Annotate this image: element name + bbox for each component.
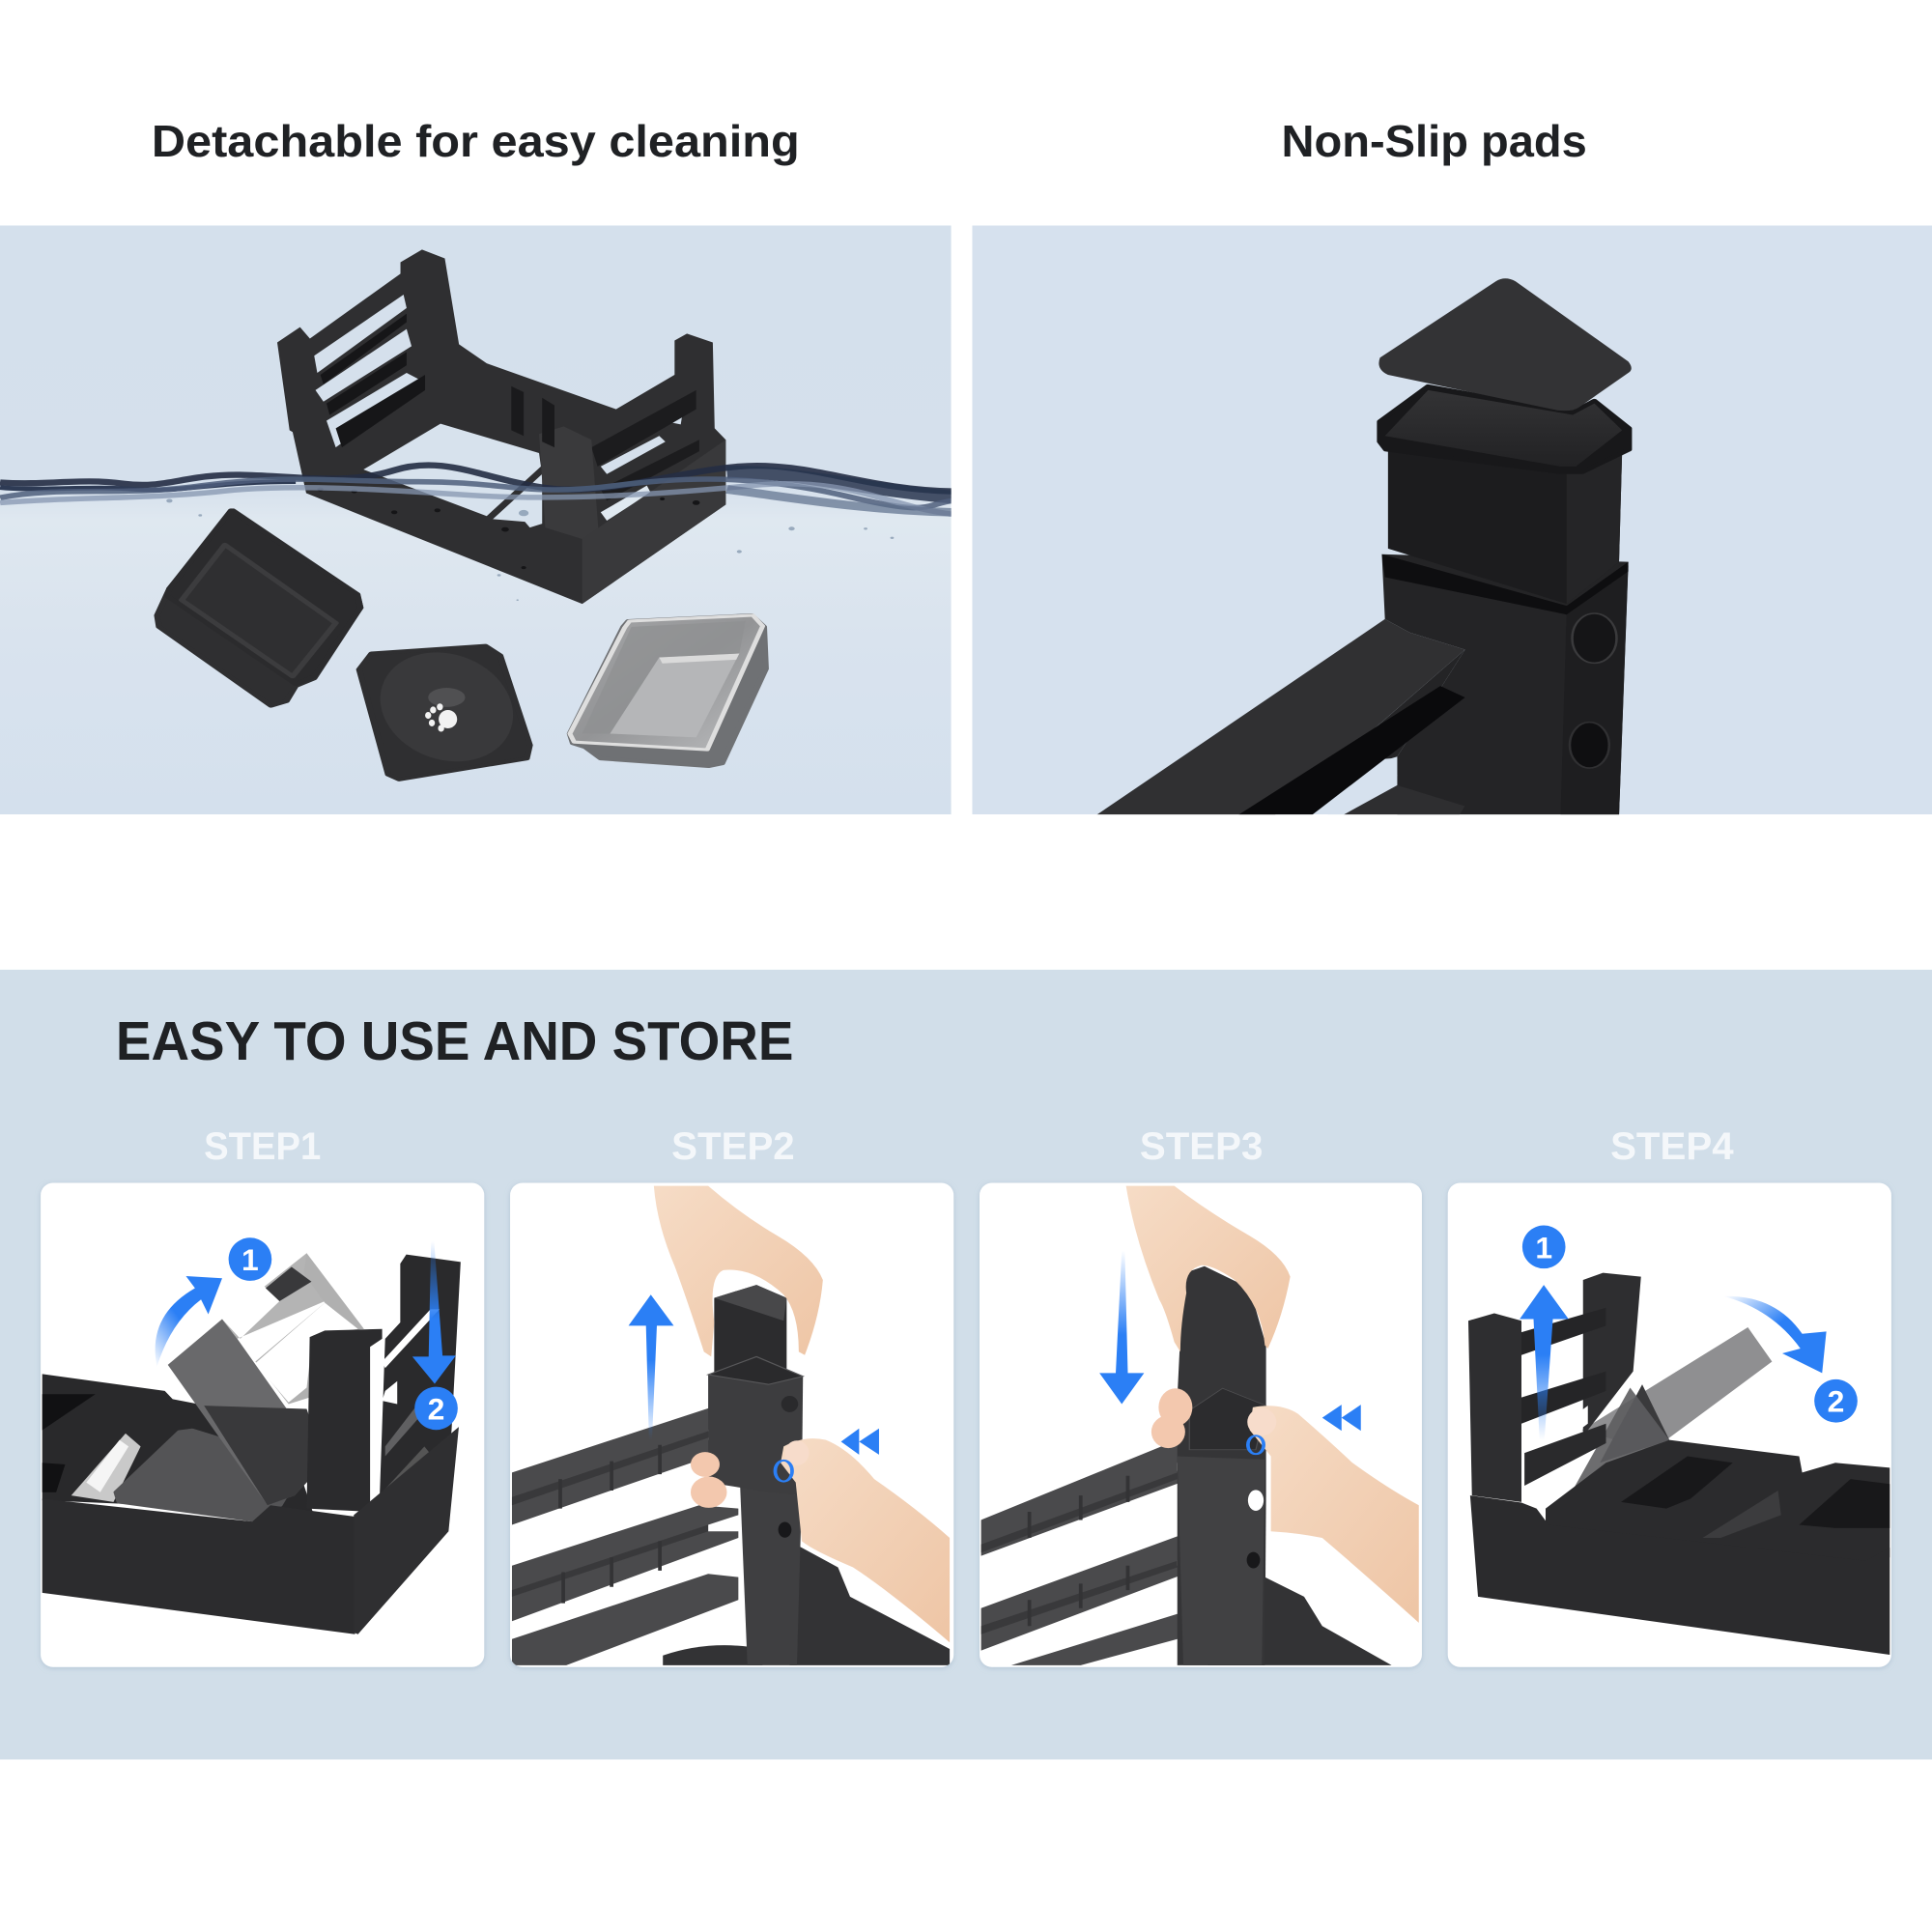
right base piece [1208,1577,1392,1665]
panel: non-slip pads [972,225,1932,815]
icon: blue release button [775,1461,792,1482]
telescoping post [708,1285,803,1665]
translucent swinging frame [1564,1327,1772,1509]
badge: number 1: 1 [242,1242,259,1277]
card: step 3 [980,1182,1422,1667]
water bubbles [166,498,894,601]
badge: number 2 [1814,1379,1858,1423]
black bowl holder [157,510,360,706]
base box [43,1427,459,1634]
base box [1470,1495,1889,1655]
curved rack foot [663,1645,762,1665]
upright ladder [1468,1273,1641,1502]
black tray with paw print [359,643,531,780]
heading: easy to use and store: EASY TO USE AND STORE [116,1010,793,1071]
badge: number 2: 2 [1828,1384,1844,1419]
hand from above [654,1186,823,1356]
step label 2: STEP2 [671,1125,795,1168]
arrow: up [629,1294,673,1440]
step label 1: STEP1 [204,1125,321,1168]
arrow: curved up [156,1276,222,1367]
non-slip pad [1378,278,1632,411]
rack frame [277,249,725,604]
telescoping post [1178,1266,1266,1665]
card: step 1 [41,1182,484,1667]
water surface waves [0,466,952,514]
badge: number 2 [414,1387,458,1430]
arrow: down [1099,1251,1144,1404]
fingers and supporting hand [691,1438,950,1642]
rack arms [512,1407,738,1665]
badge: number 1: 1 [1535,1230,1552,1264]
arrow: curved down [1723,1296,1827,1373]
badge: number 2: 2 [428,1391,444,1426]
lower post and arms [1095,554,1629,815]
folded rack floor [1546,1440,1889,1566]
icon: blue release button [1248,1435,1264,1454]
rack arms [981,1445,1178,1665]
step label 4: STEP4 [1610,1125,1734,1168]
rack interior with trays [43,1374,313,1520]
right rack ladder [379,1255,461,1512]
front post [306,1329,383,1512]
badge: number 1 [1522,1225,1566,1268]
arrow: up [1520,1285,1569,1440]
hand from above [1126,1186,1291,1351]
badge: number 1 [229,1237,271,1281]
swinging side frame [168,1253,364,1505]
right base piece [789,1545,950,1665]
heading: non-slip pads: Non-Slip pads [1282,116,1587,166]
card: step 4 [1448,1182,1891,1667]
icon: double press arrows [1322,1405,1361,1431]
stainless steel bowl [570,615,766,766]
card: step 2 [510,1182,953,1667]
arrow: down [412,1240,456,1383]
heading: detachable for easy cleaning: Detachable for easy cleaning [152,116,800,166]
step label 3: STEP3 [1140,1125,1263,1168]
cap [1380,386,1629,604]
icon: double press arrows [841,1429,879,1455]
fingers and supporting hand [1151,1388,1419,1623]
section background: easy to use and store [0,970,1932,1759]
panel: detachable parts in water [0,225,952,814]
icon: paw print [425,703,457,732]
